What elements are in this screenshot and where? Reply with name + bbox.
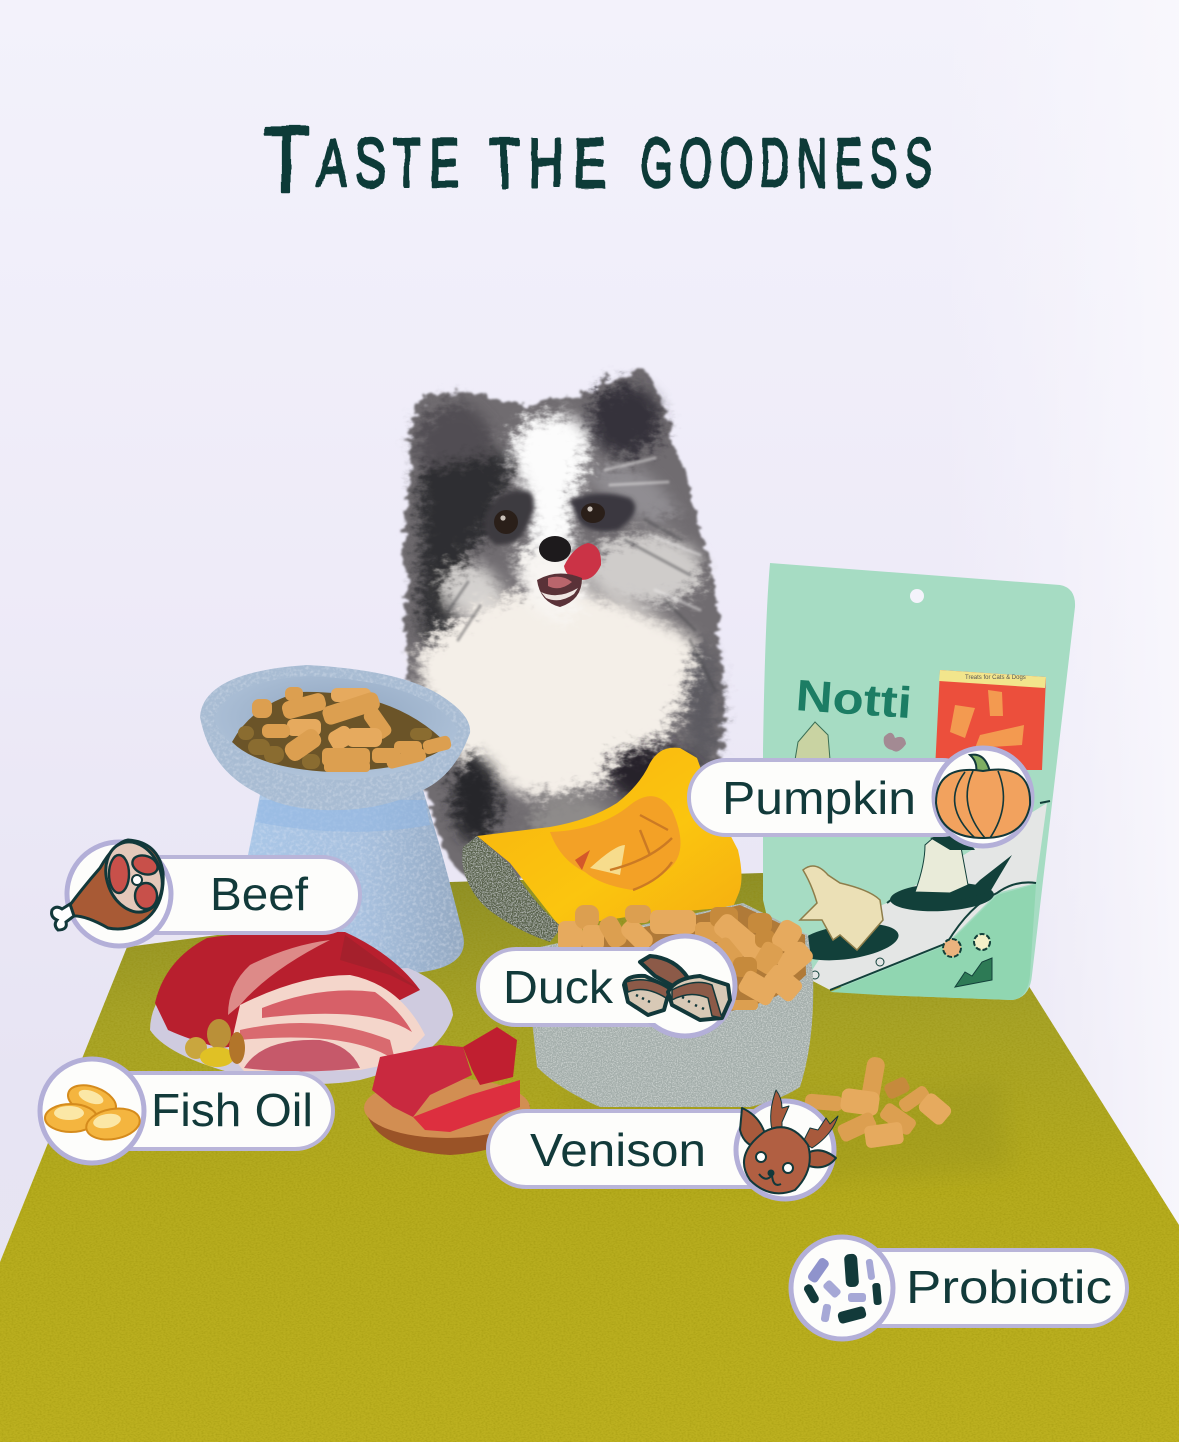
dog white chest (416, 588, 696, 798)
kibble in grey bowl (558, 905, 816, 1010)
blue raised bowl (200, 665, 470, 977)
label: Venison: Venison (530, 1124, 706, 1176)
dog eye patches (484, 490, 534, 545)
pumpkin wedge (462, 748, 742, 942)
label: Beef (52, 834, 360, 946)
dog fur body (404, 370, 724, 880)
icon: fish oil capsules (45, 1079, 142, 1143)
icon: deer (740, 1090, 838, 1193)
table cloth (0, 873, 1179, 1442)
icon: probiotic bacteria (803, 1254, 882, 1324)
label: Fish Oil: Fish Oil (151, 1084, 313, 1136)
table kibble pile (804, 1056, 954, 1149)
dog mouth (537, 573, 582, 607)
fish oil capsules on plate (185, 1037, 207, 1059)
label: Duck: Duck (503, 961, 614, 1013)
dog eyes (494, 510, 518, 534)
dog fur streaks (442, 458, 715, 690)
product pouch (763, 563, 1075, 1000)
title: GOODNESS (640, 124, 940, 202)
kibble in blue bowl (238, 687, 452, 772)
label: Venison (488, 1090, 838, 1199)
pouch hanging hole (910, 589, 924, 603)
skateboarding dog (793, 918, 901, 966)
label: Fish Oil (40, 1059, 333, 1163)
pouch butterfly (884, 733, 906, 752)
dog tongue (564, 543, 601, 580)
pouch flowers and grass (943, 939, 961, 957)
product pouch: Treats for Cats & Dogs (965, 675, 1026, 681)
dog (404, 370, 724, 880)
venison cubes on wood board (364, 1027, 530, 1155)
label: Beef: Beef (210, 868, 308, 920)
title: ASTE (317, 124, 467, 202)
speckled grey bowl (532, 903, 813, 1107)
pork slices (232, 975, 425, 1072)
label: Probiotic (791, 1237, 1127, 1339)
label: Duck (478, 936, 735, 1036)
label: Probiotic: Probiotic (906, 1261, 1112, 1313)
title (263, 107, 940, 214)
icon: pumpkin (936, 755, 1030, 838)
label: Pumpkin: Pumpkin (722, 772, 916, 824)
pouch cat (795, 722, 830, 760)
dog blaze (511, 414, 589, 570)
title: T (263, 107, 310, 214)
icon: beef leg (52, 834, 172, 930)
red pouch window (935, 670, 1046, 770)
meat plate (150, 932, 453, 1084)
skateboarding cat (889, 880, 995, 914)
icon: duck pieces (624, 956, 730, 1020)
pouch brand: Notti (794, 671, 913, 728)
dog nose (539, 536, 571, 562)
label: Pumpkin (689, 748, 1032, 846)
title: THE (489, 124, 615, 202)
